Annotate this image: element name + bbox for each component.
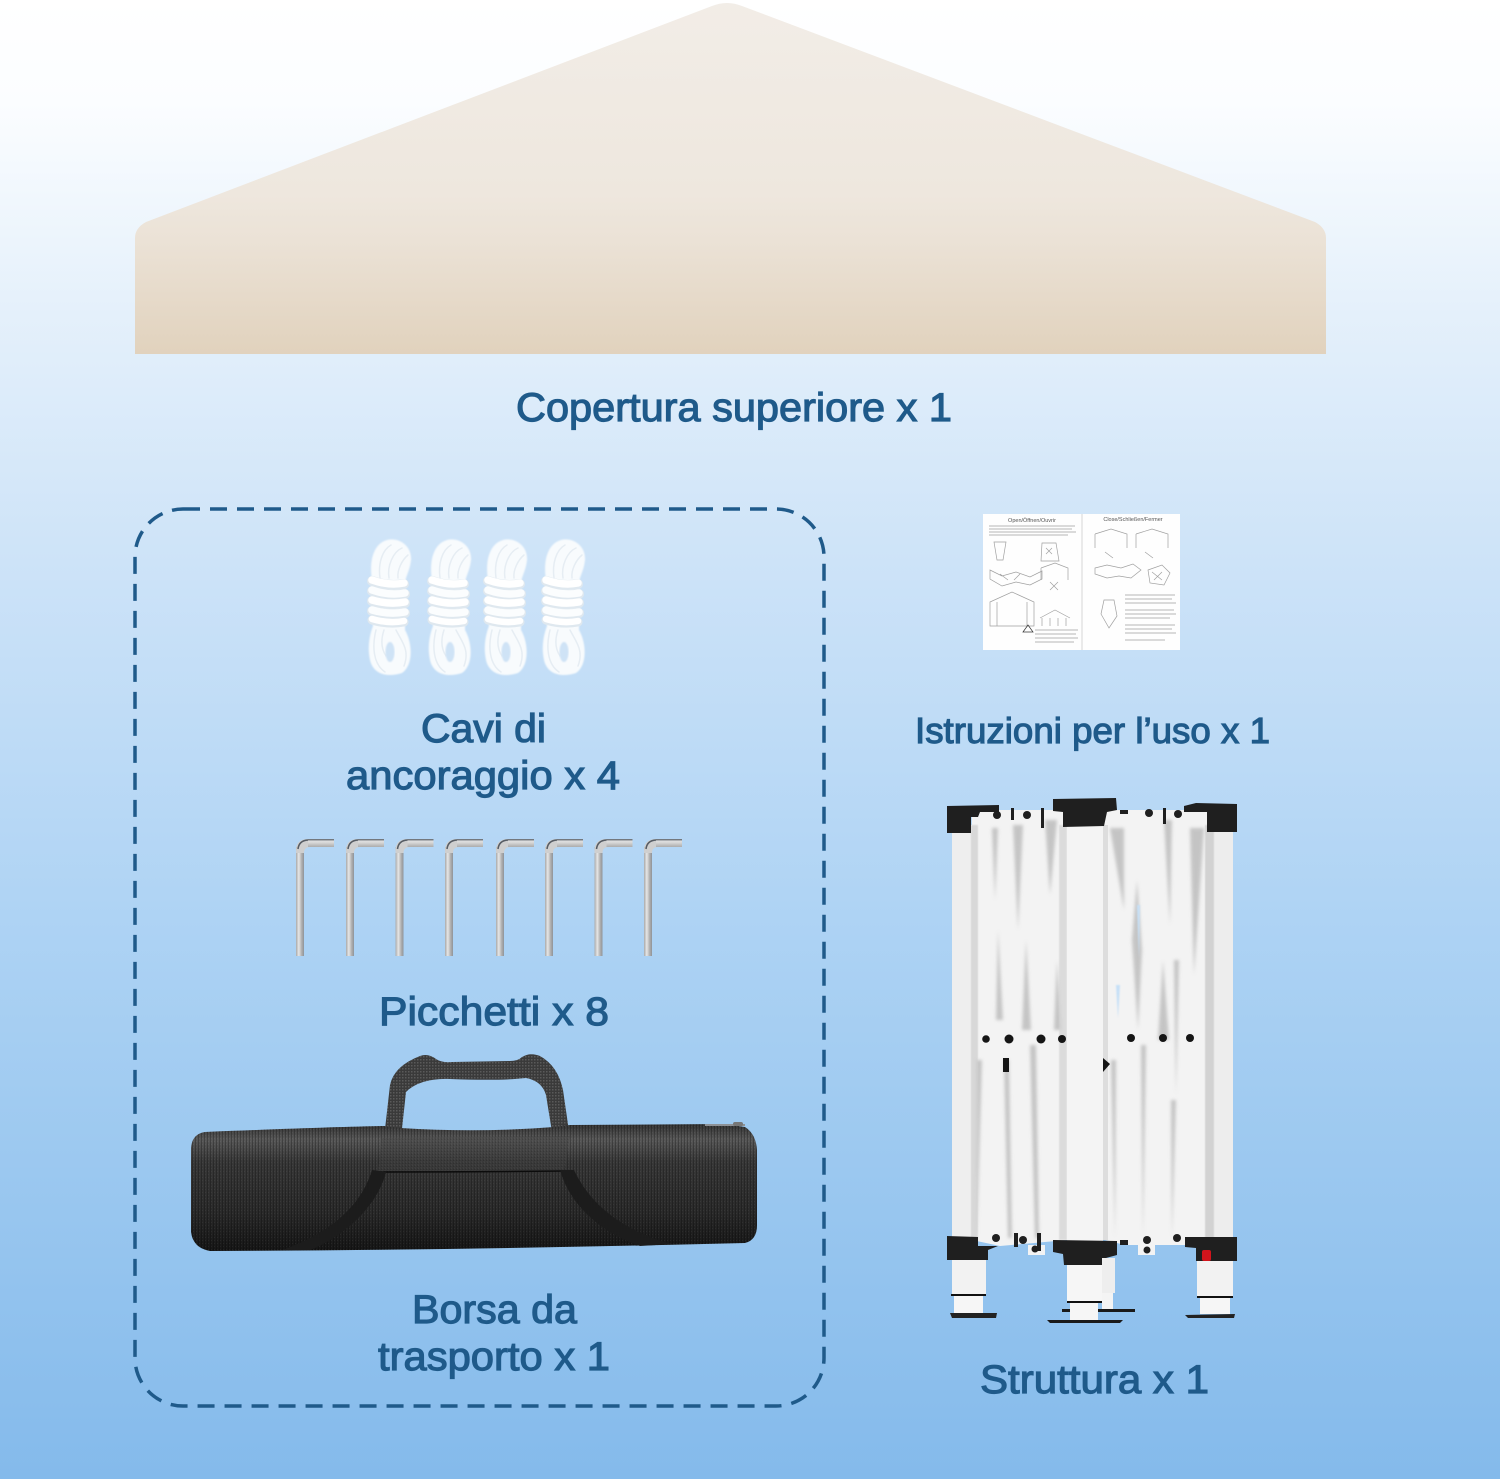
label: bag <box>378 1288 610 1379</box>
label: ropes: Cavi di <box>421 707 546 751</box>
legs and feet <box>950 1258 1235 1323</box>
icon: instruction manual: Open/Öffnen/Ouvrir <box>1008 517 1056 524</box>
bottom connectors <box>947 1233 1237 1265</box>
gaps <box>1116 905 1140 1018</box>
frame columns <box>952 820 1233 1245</box>
red lock button <box>1202 1250 1211 1261</box>
rear strut ends <box>1028 1245 1155 1255</box>
scissor shading slivers <box>976 820 1204 1238</box>
label: top cover: Copertura superiore x 1 <box>516 386 952 430</box>
dashed accessories panel <box>135 509 824 1406</box>
scissor panel fill <box>972 810 1207 1246</box>
icon: folding frame <box>947 798 1237 1323</box>
label: stakes: Picchetti x 8 <box>379 990 609 1034</box>
label: frame: Struttura x 1 <box>980 1358 1209 1402</box>
hinge pins <box>982 1034 1194 1072</box>
label: bag: Borsa da <box>412 1288 578 1332</box>
icon: anchor ropes <box>369 539 585 675</box>
icon: stakes <box>296 839 682 956</box>
icon: instruction manual: Close/Schließen/Fermer <box>1103 517 1163 523</box>
canopy top cover <box>135 3 1326 354</box>
label: bag: trasporto x 1 <box>378 1335 610 1379</box>
top connectors <box>947 798 1237 833</box>
label: ropes <box>346 707 620 798</box>
icon: carry bag <box>191 1054 757 1251</box>
label: manual: Istruzioni per l’uso x 1 <box>915 710 1270 751</box>
label: ropes: ancoraggio x 4 <box>346 754 620 798</box>
icon: instruction manual <box>983 514 1180 650</box>
